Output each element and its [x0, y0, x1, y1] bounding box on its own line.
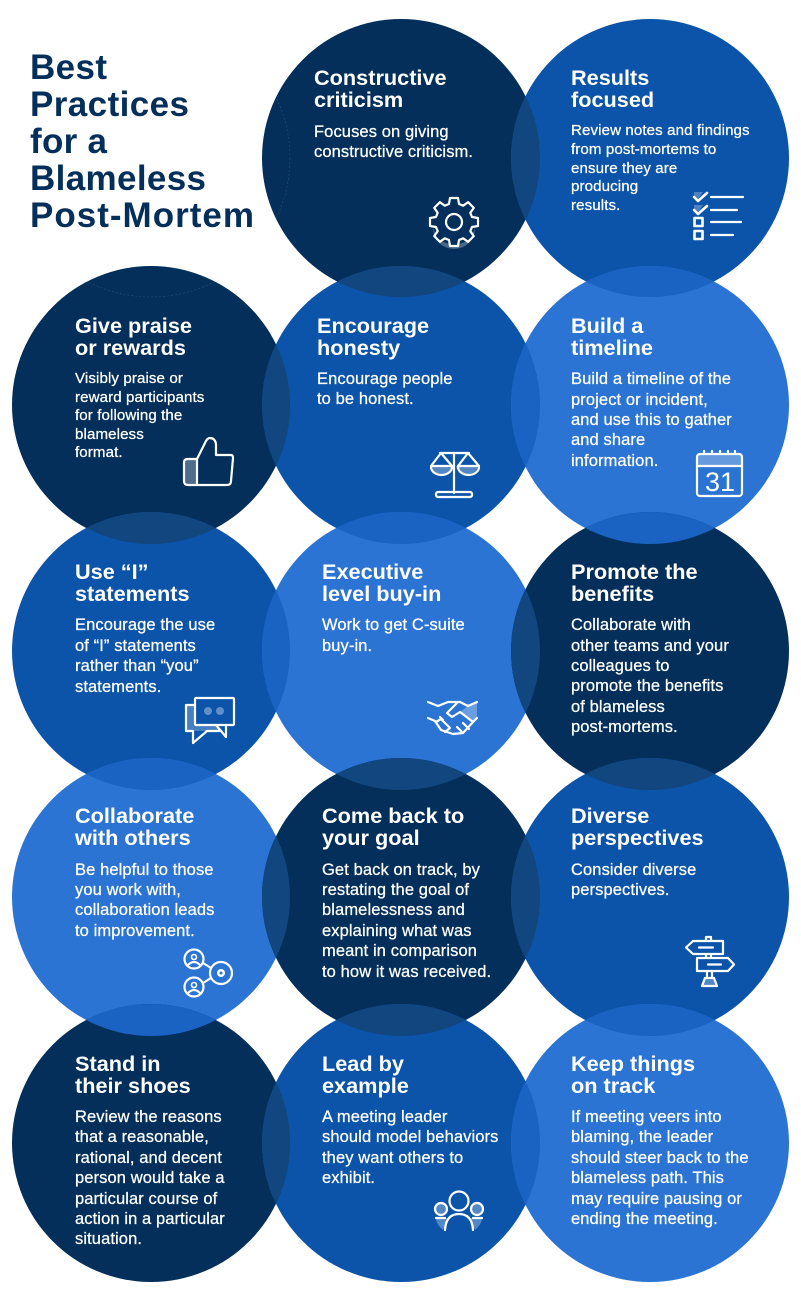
text block: ending the meeting.: [571, 1210, 718, 1228]
panel: executive level buy-in: [262, 512, 526, 774]
text block: statements.: [75, 678, 161, 696]
text block: [571, 1108, 749, 1228]
panel: encourage honesty: [262, 266, 526, 528]
heading: Keep things: [571, 1051, 695, 1076]
heading: focused: [571, 87, 654, 112]
text block: constructive criticism.: [314, 143, 473, 161]
text block: should model behaviors: [322, 1128, 498, 1146]
text block: blaming, the leader: [571, 1128, 714, 1146]
heading: [317, 313, 429, 360]
text block: blameless: [75, 426, 144, 443]
text block: action in a particular: [75, 1210, 225, 1228]
text block: [571, 616, 729, 736]
text block: [75, 370, 204, 461]
text block: producing: [571, 178, 638, 195]
icon: calendar: 31: [705, 467, 735, 497]
icon: gear: [430, 198, 478, 249]
text block: If meeting veers into: [571, 1108, 722, 1126]
heading: your goal: [322, 825, 420, 850]
text block: format.: [75, 444, 123, 461]
text block: [571, 370, 732, 470]
heading: Lead by: [322, 1051, 404, 1076]
icon: calendar: [697, 451, 742, 497]
text block: to improvement.: [75, 922, 195, 940]
heading: on track: [571, 1073, 656, 1098]
heading: Give praise: [75, 313, 192, 338]
text block: from post-mortems to: [571, 141, 716, 158]
panel: give praise or rewards: [12, 266, 276, 528]
text block: Encourage the use: [75, 616, 215, 634]
heading: benefits: [571, 581, 654, 606]
text block: rational, and decent: [75, 1149, 222, 1167]
panel: keep things on track: [511, 1004, 789, 1282]
icon: thumbs up: [184, 438, 233, 485]
panel: promote the benefits: [511, 512, 789, 790]
text block: Be helpful to those: [75, 861, 214, 879]
text block: explaining what was: [322, 922, 472, 940]
heading: example: [322, 1073, 409, 1098]
text block: results.: [571, 197, 620, 214]
text block: buy-in.: [322, 637, 372, 655]
heading: their shoes: [75, 1073, 191, 1098]
text block: particular course of: [75, 1190, 218, 1208]
heading: [75, 1051, 191, 1098]
text block: reward participants: [75, 389, 204, 406]
text block: promote the benefits: [571, 677, 723, 695]
text block: Build a timeline of the: [571, 370, 731, 388]
text block: and use this to gather: [571, 411, 732, 429]
text block: that a reasonable,: [75, 1128, 209, 1146]
text block: for following the: [75, 407, 182, 424]
panel: use I statements: [12, 512, 276, 774]
text block: other teams and your: [571, 637, 729, 655]
icon: signpost: [686, 937, 734, 986]
icon: scales: [431, 453, 479, 497]
heading: [75, 559, 190, 606]
text block: they want others to: [322, 1149, 463, 1167]
text block: may require pausing or: [571, 1190, 742, 1208]
text block: Review the reasons: [75, 1108, 222, 1126]
text block: [571, 861, 696, 899]
heading: [571, 559, 698, 606]
text block: situation.: [75, 1230, 142, 1248]
panel: lead by example: [262, 1004, 540, 1282]
text block: Visibly praise or: [75, 370, 183, 387]
heading: timeline: [571, 335, 653, 360]
title: for a: [30, 122, 108, 161]
icon: handshake: [428, 702, 477, 734]
heading: Executive: [322, 559, 423, 584]
icon: group of people: [435, 1192, 483, 1230]
heading: [322, 1051, 409, 1098]
heading: [571, 803, 704, 850]
heading: Stand in: [75, 1051, 161, 1076]
heading: level buy-in: [322, 581, 441, 606]
text block: person would take a: [75, 1169, 225, 1187]
heading: perspectives: [571, 825, 704, 850]
text block: to be honest.: [317, 390, 414, 408]
heading: Results: [571, 65, 649, 90]
text block: colleagues to: [571, 657, 670, 675]
text block: [571, 122, 750, 214]
text block: rather than “you”: [75, 657, 199, 675]
heading: [571, 1051, 695, 1098]
heading: [322, 803, 464, 850]
text block: perspectives.: [571, 881, 670, 899]
heading: Constructive: [314, 65, 447, 90]
text block: Collaborate with: [571, 616, 691, 634]
heading: [74, 803, 194, 850]
text block: Consider diverse: [571, 861, 696, 879]
text block: [75, 616, 215, 696]
heading: Collaborate: [75, 803, 194, 828]
text block: Focuses on giving: [314, 123, 449, 141]
title: [30, 48, 254, 235]
heading: Diverse: [571, 803, 649, 828]
heading: [571, 313, 653, 360]
text block: information.: [571, 452, 658, 470]
heading: criticism: [314, 87, 403, 112]
heading: Come back to: [322, 803, 464, 828]
text block: [322, 616, 465, 655]
text block: to how it was received.: [322, 963, 491, 981]
text block: project or incident,: [571, 391, 708, 409]
heading: honesty: [317, 335, 400, 360]
panel: constructive criticism: [262, 19, 526, 282]
icon: checklist: [694, 192, 743, 239]
heading: [314, 65, 447, 112]
text block: of “I” statements: [75, 637, 196, 655]
heading: with others: [74, 825, 191, 850]
text block: A meeting leader: [322, 1108, 448, 1126]
text block: and share: [571, 431, 645, 449]
text block: exhibit.: [322, 1169, 375, 1187]
icon: connected people and gear: [184, 950, 232, 996]
title: Best: [30, 48, 107, 87]
text block: [75, 1108, 225, 1248]
text block: [314, 123, 473, 161]
text block: post-mortems.: [571, 718, 678, 736]
text block: restating the goal of: [322, 881, 469, 899]
text block: Work to get C-suite: [322, 616, 465, 634]
heading: or rewards: [75, 335, 186, 360]
title: Practices: [30, 85, 189, 124]
title: Blameless: [30, 159, 206, 198]
panel: stand in their shoes: [12, 1004, 290, 1282]
text block: [322, 861, 491, 981]
text block: collaboration leads: [75, 901, 214, 919]
text block: meant in comparison: [322, 942, 477, 960]
heading: [75, 313, 192, 360]
heading: Use “I”: [75, 559, 149, 584]
text block: of blameless: [571, 698, 665, 716]
panel: come back to your goal: [262, 758, 526, 1020]
text block: Get back on track, by: [322, 861, 481, 879]
heading: [571, 65, 654, 112]
panel: build a timeline: [511, 266, 789, 544]
text block: [322, 1108, 498, 1187]
text block: should steer back to the: [571, 1149, 749, 1167]
text block: blamelessness and: [322, 901, 465, 919]
heading: [322, 559, 441, 606]
heading: Build a: [571, 313, 644, 338]
text block: blameless path. This: [571, 1169, 724, 1187]
text block: you work with,: [75, 881, 181, 899]
heading: statements: [75, 581, 190, 606]
icon: chat bubbles: [186, 698, 234, 743]
text block: Review notes and findings: [571, 122, 750, 139]
title: Post-Mortem: [30, 196, 254, 235]
text block: [317, 370, 453, 408]
heading: Encourage: [317, 313, 429, 338]
panel: results focused: [511, 19, 789, 297]
text block: [75, 861, 214, 940]
panel: collaborate with others: [12, 758, 276, 1020]
text block: Encourage people: [317, 370, 453, 388]
panel: diverse perspectives: [511, 758, 789, 1036]
heading: Promote the: [571, 559, 698, 584]
text block: ensure they are: [571, 160, 677, 177]
